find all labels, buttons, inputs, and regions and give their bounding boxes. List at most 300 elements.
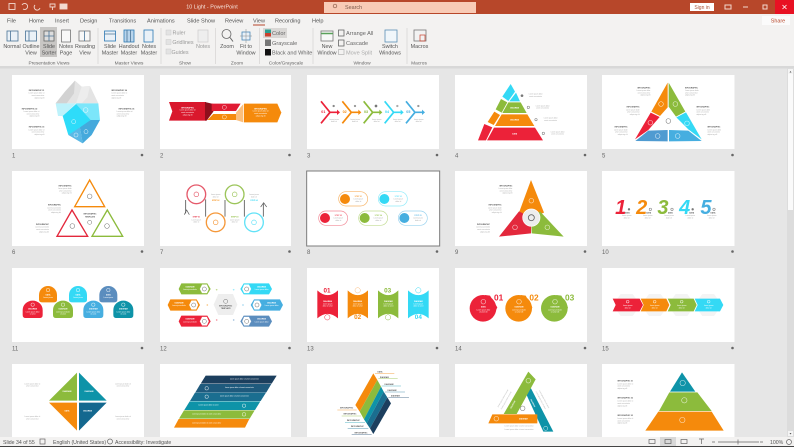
- ribbon tabs: Transitions: [109, 18, 136, 24]
- teardrop text: sit amet elit: [515, 311, 524, 314]
- dome text: Lorem ipsum dolor: [56, 311, 70, 313]
- arrow captions: [329, 105, 424, 123]
- slide 2 banner text: Lorem ipsum dolor sit: [253, 110, 269, 113]
- slide 9 text: adipiscing elit: [480, 230, 491, 233]
- slide 9 text: [476, 184, 513, 233]
- slide 1 text blocks: INFOGRAPHIC 02: [22, 107, 37, 110]
- slide 8: selected slide with pills: [307, 171, 440, 246]
- slide 6 text: [35, 184, 97, 233]
- slide 1 text blocks: amet consectetur: [32, 94, 45, 97]
- sign in button: Sign in: [694, 5, 710, 11]
- ribbon tabs: Help: [312, 18, 324, 24]
- ribbon group labels: Window: [353, 60, 371, 66]
- slide numbers: 8: [307, 250, 311, 256]
- slide 4 captions: Lorem ipsum dolor: [536, 105, 550, 107]
- slide 7 captions: dolor sit: [213, 195, 219, 198]
- slide 7 captions: Lorem ipsum: [211, 194, 221, 196]
- slide numbers: 11: [12, 346, 19, 352]
- slide 7 captions: STEP 01: [193, 216, 200, 218]
- arrow captions: dolor sit: [374, 120, 380, 123]
- slide 1 text blocks: INFOGRAPHIC 01: [29, 89, 44, 92]
- pill: green: Lorem ipsum: [374, 218, 384, 220]
- ribbon group labels: Presentation Views: [29, 60, 70, 66]
- pyramid text: adipiscing elit: [617, 404, 628, 407]
- triangle captions: Lorem ipsum dolor sit amet: [500, 391, 513, 410]
- dome text: Lorem ipsum dolor: [116, 311, 131, 313]
- pill: blue: Lorem ipsum: [413, 218, 423, 220]
- pill: red: STEP 02: [335, 215, 342, 217]
- dome text: sit amet: [90, 313, 97, 316]
- pill: red: Lorem ipsum: [334, 218, 344, 220]
- slide 10 captions: dolor sit: [687, 216, 694, 219]
- teardrop text: Lorem ipsum dolor: [512, 309, 526, 311]
- arrow 03: 03: [364, 110, 368, 114]
- sign in button: [690, 3, 714, 11]
- pill: blue: [398, 211, 427, 225]
- slide 10: numbered list: 3: [657, 197, 669, 219]
- rhombus captions: INFOGRAPHIC: [351, 425, 364, 428]
- slide numbers: 9: [455, 250, 459, 256]
- slide 6 text: amet consectetur: [36, 228, 49, 231]
- arrow captions: Lorem ipsum: [372, 119, 382, 121]
- diamond labels: DIAGRAM: [63, 390, 72, 393]
- slide 2 banner text: INFOGRAPHIC: [254, 107, 268, 110]
- dome text: sit amet: [30, 313, 36, 316]
- slide numbers: [12, 154, 609, 352]
- banner text: dolor sit amet: [413, 305, 424, 308]
- ribbon tabs: File: [7, 18, 16, 24]
- band text: Lorem ipsum dolor sit amet consectetur: [225, 386, 254, 389]
- presentation view labels: Master: [121, 50, 137, 56]
- chevron text: [623, 305, 714, 309]
- macros button: Macros: [411, 44, 429, 50]
- triangle band labels: DIAGRAM: [519, 418, 528, 421]
- slide 5 text blocks: Lorem ipsum dolor: [614, 129, 628, 131]
- slide 9 text: INFOGRAPHIC: [499, 184, 513, 187]
- banner text: DIAGRAM: [323, 300, 333, 303]
- pill: red: [319, 211, 348, 225]
- presentation view labels: View: [79, 50, 91, 56]
- dome text: DIAGRAM: [59, 308, 68, 311]
- status text: English (United States): [53, 440, 106, 446]
- dome text: Lorem ipsum dolor: [26, 311, 40, 313]
- slide 2 banner text: adipiscing elit: [256, 114, 266, 117]
- arrow 01: 01: [321, 110, 325, 114]
- tag text: [172, 285, 279, 323]
- slide 5 text blocks: amet consectetur: [627, 111, 640, 114]
- tag text: DIAGRAM: [257, 318, 267, 321]
- dome text: DATA: [46, 294, 51, 297]
- presentation view labels: Slide: [104, 44, 116, 50]
- show options: Ruler: [173, 30, 186, 36]
- dome text: sit amet: [120, 313, 127, 316]
- ribbon tabs: Slide Show: [187, 18, 216, 24]
- slide 6 text: INFOGRAPHIC: [36, 223, 50, 226]
- slide 4 captions: [521, 94, 565, 136]
- macros button: [411, 30, 429, 50]
- slide 1 text blocks: adipiscing elit: [29, 115, 40, 118]
- slide 6 text: Lorem ipsum dolor: [47, 207, 61, 209]
- pyramid text: Lorem ipsum dolor sit: [617, 417, 634, 420]
- tag text: Lorem ipsum dolor: [255, 321, 269, 323]
- share button: [762, 16, 790, 25]
- show options: Notes: [196, 44, 210, 50]
- slide 17: slanted bands: [174, 376, 277, 428]
- banner text: dolor sit amet: [383, 305, 394, 308]
- ribbon tabs: Review: [225, 18, 244, 24]
- window group: Arrange All: [346, 31, 373, 37]
- banner numbers: 03: [384, 287, 392, 294]
- slide 4: segmented pyramid: DATA: [512, 133, 518, 136]
- ribbon separators: [98, 28, 407, 64]
- ribbon group labels: Macros: [411, 60, 427, 66]
- dome text: DIAGRAM: [119, 308, 128, 311]
- window group: Switch: [382, 44, 398, 50]
- slide 10 captions: Lorem ipsum: [707, 215, 717, 217]
- arrow captions: Lorem ipsum: [414, 119, 424, 121]
- banner text: Lorem ipsum: [384, 303, 394, 305]
- slide 1 text blocks: INFOGRAPHIC 03: [29, 126, 44, 129]
- colour options: [263, 28, 312, 56]
- scrollbar: [787, 68, 794, 437]
- slide 10 captions: dolor sit: [645, 216, 651, 219]
- slide numbers: 4: [455, 154, 459, 160]
- rhombus captions: DIAGRAM: [391, 395, 400, 398]
- slide numbers: 5: [602, 154, 606, 160]
- slide 10 captions: Lorem ipsum: [622, 215, 632, 217]
- slide 4 captions: amet consectetur: [551, 133, 564, 136]
- chevron text: Lorem ipsum: [704, 305, 714, 307]
- show options: Gridlines: [172, 40, 194, 46]
- zoom buttons: Window: [236, 50, 256, 56]
- slide 7 captions: dolor sit: [193, 221, 200, 224]
- diamond captions: amet consectetur: [117, 385, 130, 388]
- slide 4 captions: Lorem ipsum dolor: [529, 94, 543, 96]
- window controls: [725, 0, 794, 14]
- slide 2 banner text: INFOGRAPHIC: [181, 106, 195, 109]
- banner text: DIAGRAM: [414, 300, 423, 303]
- rhombus captions: DIAGRAM: [380, 376, 389, 379]
- slide backgrounds: [12, 75, 734, 439]
- slide transition markers: [141, 154, 734, 349]
- dome text: Lorem ipsum: [104, 297, 114, 299]
- presentation view labels: View: [25, 50, 37, 56]
- slide 1 text blocks: [22, 89, 134, 136]
- slide 10 captions: DATA: [646, 211, 652, 214]
- slide 1 text blocks: amet consectetur: [27, 112, 40, 115]
- slide numbers: 7: [160, 250, 164, 256]
- diamond captions: Lorem ipsum dolor sit: [24, 382, 41, 385]
- teardrop numbers: [494, 292, 575, 302]
- slide 5 text blocks: INFOGRAPHIC: [707, 126, 721, 129]
- slide 19: ribbon triangle: [488, 372, 553, 432]
- slide 10 captions: DATA: [625, 211, 630, 214]
- slide 7 captions: Lorem ipsum: [230, 219, 240, 221]
- slide 5 text blocks: Lorem ipsum dolor: [707, 129, 721, 131]
- slide 1 text blocks: amet consectetur: [111, 94, 124, 97]
- tag text: Lorem ipsum dolor: [265, 305, 279, 307]
- rhombus captions: INFOGRAPHIC: [354, 432, 368, 435]
- teardrop text: DATA: [481, 305, 486, 308]
- presentation view labels: Master: [141, 50, 157, 56]
- slide 6 text: Lorem ipsum dolor: [58, 188, 72, 190]
- banner text: Lorem ipsum: [414, 303, 424, 305]
- slide 11: domes: [23, 286, 133, 318]
- slide 2 banner text: adipiscing elit: [183, 113, 193, 116]
- slide 6 text: adipiscing elit: [39, 230, 50, 233]
- triangle band labels: DIAGRAM: [529, 399, 536, 408]
- slide 20: stacked pyramid: [617, 372, 724, 431]
- ribbon group labels: [29, 60, 427, 66]
- diamond captions: [24, 382, 131, 420]
- slide 18: striped rhombus: [337, 370, 409, 435]
- slide 5 text blocks: adipiscing elit: [707, 133, 718, 136]
- status bar: [0, 437, 794, 447]
- banner numbers: 04: [415, 314, 422, 321]
- pill: red: dolor sit: [335, 219, 342, 222]
- slide 9 text: Lorem ipsum dolor: [488, 207, 502, 209]
- slide 9: three-petal triangle: [476, 180, 564, 237]
- banner text: Lorem ipsum: [323, 303, 333, 305]
- band text: Lorem ipsum dolor sit amet consectetur: [192, 412, 222, 415]
- pill: cyan: STEP 03: [395, 196, 402, 198]
- tag text: Lorem ipsum dolor: [172, 305, 186, 307]
- pyramid text: INFOGRAPHIC 03: [617, 414, 633, 417]
- chevron text: dolor sit: [706, 306, 712, 309]
- slide 7 captions: [192, 194, 259, 224]
- tag text: Lorem ipsum dolor: [183, 321, 197, 323]
- ribbon tabs: [7, 18, 324, 26]
- slide 10 captions: Lorem ipsum: [643, 215, 653, 217]
- arrow captions: dolor sit: [395, 120, 401, 123]
- arrow captions: dolor sit: [331, 120, 337, 123]
- teardrop text: sit amet elit: [479, 311, 488, 314]
- band text: Lorem ipsum dolor sit amet consectetur: [230, 377, 259, 380]
- slide 7 captions: dolor sit: [232, 221, 238, 224]
- slide 10 captions: dolor sit: [624, 216, 630, 219]
- title bar: [0, 0, 794, 14]
- triangle captions: Lorem ipsum dolor sit amet: [497, 389, 509, 408]
- pill: green: [359, 211, 388, 225]
- slide 10 captions: [622, 208, 717, 219]
- document title: 10 Light - PowerPoint: [186, 4, 238, 10]
- arrow 02: 02: [343, 110, 347, 114]
- colour options: Color: [272, 31, 286, 37]
- pill: orange: Lorem ipsum: [354, 199, 364, 201]
- presentation view icons: [7, 30, 153, 42]
- slide 5 text blocks: INFOGRAPHIC: [696, 106, 710, 109]
- ribbon tabs: Design: [80, 18, 97, 24]
- slide 9 text: amet consectetur: [489, 209, 502, 212]
- rhombus captions: DIAGRAM: [388, 389, 397, 392]
- slide 2 banner text: amet consectetur: [181, 111, 194, 114]
- slide 4 captions: amet consectetur: [536, 107, 549, 110]
- pyramid text: amet consectetur: [617, 385, 630, 388]
- slide 6 text: TEMPLATE: [85, 215, 96, 218]
- slide 4 captions: amet consectetur: [544, 119, 557, 122]
- ribbon group labels: Show: [179, 60, 192, 66]
- selected slide sorter button: [40, 27, 57, 57]
- banner text: Lorem ipsum: [353, 303, 363, 305]
- quick access icons: [9, 3, 67, 10]
- slide numbers: 1: [12, 154, 16, 160]
- slide 9 text: Lorem ipsum dolor: [476, 227, 490, 229]
- slide 1 text blocks: INFOGRAPHIC 05: [119, 107, 134, 110]
- ribbon group labels: Zoom: [231, 60, 243, 66]
- slide 5 text blocks: amet consectetur: [685, 91, 698, 94]
- slide numbers: 13: [307, 346, 314, 352]
- arrow captions: dolor sit: [352, 120, 358, 123]
- slide 1 text blocks: INFOGRAPHIC 04: [111, 89, 128, 92]
- slide 6 text: INFOGRAPHIC: [59, 184, 72, 187]
- slide 6 text: INFOGRAPHIC: [48, 204, 62, 207]
- teardrop text: [476, 305, 562, 314]
- pill: orange: STEP 01: [355, 196, 362, 198]
- slide 6 text: INFOGRAPHIC: [83, 213, 97, 216]
- slide 7 captions: STEP 03: [231, 216, 238, 218]
- banner text: [323, 300, 424, 308]
- ribbon group labels: Master Views: [115, 60, 144, 66]
- pyramid text: Lorem ipsum dolor sit: [617, 400, 634, 403]
- slide 5 text blocks: INFOGRAPHIC: [685, 86, 699, 89]
- dome text: DATA: [76, 294, 81, 297]
- slide 5 text blocks: adipiscing elit: [696, 113, 707, 116]
- arrow 05: 05: [406, 110, 410, 114]
- slide 10 captions: Lorem ipsum: [686, 215, 696, 217]
- slide 4 captions: Lorem ipsum dolor: [544, 118, 558, 120]
- teardrop numbers: 03: [565, 292, 575, 302]
- rhombus captions: DIAGRAM: [385, 383, 394, 386]
- arrow captions: Lorem ipsum: [350, 119, 360, 121]
- pill: cyan: Lorem ipsum: [394, 199, 404, 201]
- slide numbers: 2: [160, 154, 164, 160]
- banner text: DIAGRAM: [384, 300, 393, 303]
- slide 5 text blocks: amet consectetur: [707, 131, 720, 134]
- slide 10: numbered list: 4: [678, 197, 690, 219]
- pyramid text: INFOGRAPHIC 01: [617, 379, 633, 382]
- tag text: DIAGRAM: [186, 285, 195, 288]
- arrow captions: dolor sit: [416, 120, 422, 123]
- presentation view labels: Reading: [75, 44, 95, 50]
- status text: 100%: [770, 440, 784, 446]
- slide 4 captions: Lorem ipsum dolor: [551, 131, 565, 133]
- ribbon: [0, 14, 794, 68]
- pill: orange: [339, 192, 368, 206]
- dome text: Lorem ipsum: [73, 297, 83, 299]
- slide numbers: 3: [307, 154, 311, 160]
- ribbon tabs: Animations: [147, 18, 175, 24]
- teardrop text: DIAGRAM: [515, 305, 524, 308]
- rhombus captions: INFOGRAPHIC: [343, 413, 357, 416]
- presentation view labels: [3, 44, 157, 56]
- tag text: DIAGRAM: [175, 301, 184, 304]
- slide 5 text blocks: INFOGRAPHIC: [615, 126, 628, 129]
- band text: Lorem ipsum dolor sit amet consectetur: [220, 395, 249, 398]
- search box: Search: [345, 5, 362, 11]
- rhombus captions: DATA: [378, 370, 383, 373]
- pill: cyan: dolor sit: [395, 200, 402, 203]
- slide 1 text blocks: amet consectetur: [32, 131, 45, 134]
- slide 1 text blocks: Lorem ipsum dolor sit: [28, 92, 45, 95]
- slide 16: quartered diamond: [24, 373, 131, 431]
- diamond captions: amet consectetur: [26, 385, 39, 388]
- slide 1 text blocks: adipiscing elit: [111, 96, 122, 99]
- share button: Share: [771, 18, 785, 24]
- slide 5 text blocks: adipiscing elit: [640, 94, 651, 97]
- slide 12: hexagon tags: [168, 283, 283, 327]
- rhombus captions: INFOGRAPHIC: [340, 406, 354, 409]
- pill: green: dolor sit: [375, 219, 382, 222]
- presentation view labels: Notes: [142, 44, 156, 50]
- teardrop text: DIAGRAM: [551, 305, 560, 308]
- pill: green: STEP 04: [375, 214, 383, 217]
- chevron text: dolor sit: [652, 306, 658, 309]
- slide 10 captions: Lorem ipsum: [664, 215, 674, 217]
- slide 7 captions: Lorem ipsum: [249, 194, 259, 196]
- zoom buttons: Zoom: [220, 44, 234, 50]
- presentation view labels: Page: [60, 50, 72, 56]
- slide 5 text blocks: amet consectetur: [615, 131, 628, 134]
- slide 9 text: amet consectetur: [477, 228, 490, 231]
- slide 1 text blocks: adipiscing elit: [117, 115, 127, 118]
- diamond labels: DATA: [65, 410, 70, 413]
- dome text: DATA: [106, 294, 111, 297]
- band text: Lorem ipsum dolor sit amet: [198, 404, 219, 407]
- slide 5 text blocks: Lorem ipsum dolor: [685, 90, 699, 92]
- show options: Guides: [171, 50, 189, 56]
- slide 10 captions: dolor sit: [666, 216, 672, 219]
- slide 4: segmented pyramid: DIAGRAM: [510, 106, 520, 109]
- slide 10 captions: DATA: [711, 211, 716, 214]
- slide 9 text: adipiscing elit: [502, 192, 513, 195]
- slide 2: ribbon banner: [169, 102, 281, 122]
- ribbon tabs: Insert: [55, 18, 69, 24]
- slide 1 text blocks: Lorem ipsum dolor sit: [28, 128, 45, 131]
- slide 10: numbered list: 1: [615, 197, 626, 219]
- presentation view labels: Handout: [119, 44, 140, 50]
- teardrop text: Lorem ipsum dolor: [476, 309, 491, 311]
- dome text: DIAGRAM: [89, 308, 98, 311]
- presentation view labels: Notes: [59, 44, 73, 50]
- diamond labels: [63, 390, 94, 413]
- teardrop text: Lorem ipsum dolor: [548, 309, 562, 311]
- window group: Cascade: [346, 41, 368, 47]
- slide 10: numbered list: 5: [700, 197, 712, 219]
- pyramid text: adipiscing elit: [617, 422, 628, 425]
- slide numbers: 15: [602, 346, 609, 352]
- slide 9 text: amet consectetur: [500, 189, 513, 192]
- show options: [166, 30, 210, 56]
- zoom buttons: Fit to: [240, 44, 252, 50]
- diamond captions: Lorem ipsum dolor sit: [115, 415, 131, 418]
- rhombus captions: INFOGRAPHIC: [347, 419, 360, 422]
- colour options: Black and White: [272, 50, 312, 56]
- diamond captions: Lorem ipsum dolor sit: [115, 382, 131, 385]
- slide 2 banner text: amet consectetur: [254, 112, 267, 115]
- slide 10 captions: DATA: [689, 211, 695, 214]
- tag text: DIAGRAM: [186, 318, 195, 321]
- dome text: DIAGRAM: [28, 308, 38, 311]
- window group: Window: [317, 50, 337, 56]
- pyramid text: Lorem ipsum dolor sit: [617, 382, 634, 385]
- slide 4: segmented pyramid: DIAGRAM: [510, 119, 520, 122]
- presentation view labels: Slide: [43, 44, 55, 50]
- status text: Accessibility: Investigate: [115, 440, 171, 446]
- tag text: Lorem ipsum dolor: [183, 289, 197, 291]
- teardrop text: sit amet elit: [551, 311, 560, 314]
- banner numbers: [323, 287, 422, 321]
- slide numbers: 10: [602, 250, 609, 256]
